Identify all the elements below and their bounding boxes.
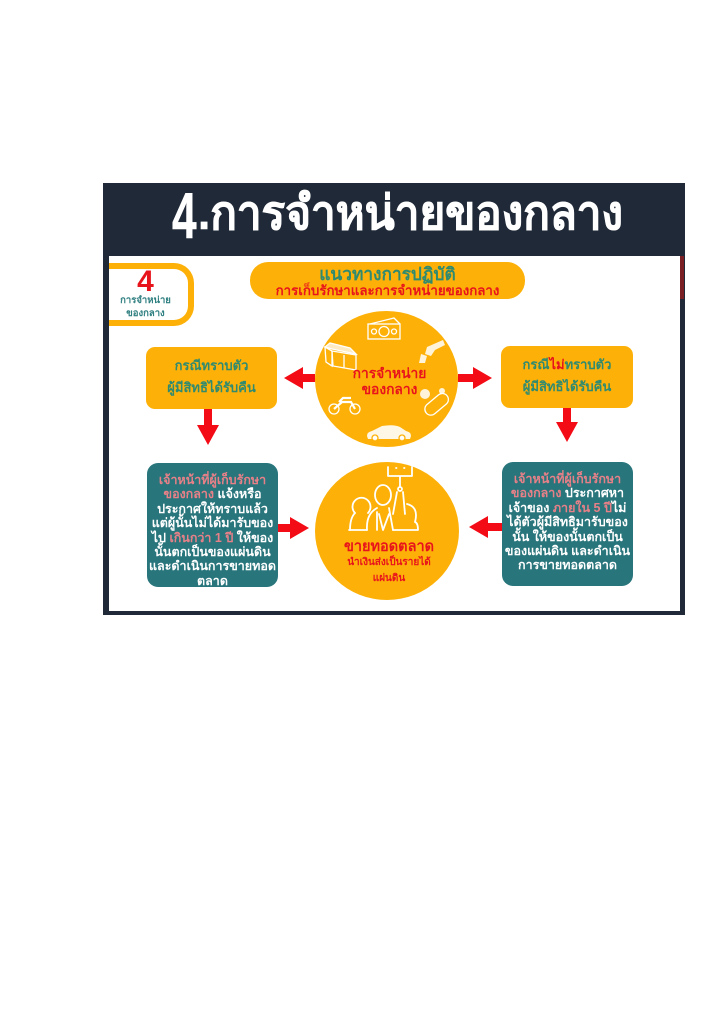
procedure text: เจ้าของ ภายใน 5 ปีไม่ [509, 501, 626, 515]
procedure text: ตลาด [197, 574, 228, 588]
procedure text: ไป เกินกว่า 1 ปี ให้ของ [152, 531, 273, 545]
title [172, 179, 623, 252]
heading text [276, 264, 499, 298]
procedure text [149, 471, 276, 588]
badge label: การจำหน่าย [120, 295, 171, 306]
circle text: นำเงินส่งเป็นรายได้ [347, 557, 431, 568]
icon: revolver [419, 340, 445, 363]
box text: กรณีทราบตัว [175, 358, 248, 373]
circle label: ของกลาง [362, 382, 417, 396]
icons: seized goods [324, 317, 449, 440]
panel: white content area [109, 256, 680, 611]
icon: auction crowd [348, 466, 419, 531]
circle label [353, 366, 426, 396]
procedure text: ของกลาง แจ้งหรือ [164, 487, 261, 501]
panel: unknown owner procedure [502, 462, 633, 586]
badge number: 4 [137, 265, 154, 298]
box text: ผู้มีสิทธิได้รับคืน [523, 379, 611, 394]
procedure text: การขายทอดตลาด [518, 558, 617, 572]
box text: ผู้มีสิทธิได้รับคืน [167, 380, 256, 395]
circle text: แผ่นดิน [373, 573, 405, 584]
procedure text [505, 470, 630, 572]
icon: cash [368, 318, 400, 339]
icon: motorcycle [329, 398, 360, 414]
arrow: circle to known box [284, 367, 315, 389]
icon: pills [420, 388, 451, 418]
badge label: ของกลาง [126, 308, 165, 318]
box text: กรณีไม่ทราบตัว [523, 357, 611, 372]
infographic frame [103, 183, 685, 615]
procedure text: แต่ผู้นั้นไม่ได้มารับของ [152, 516, 273, 530]
box text [167, 358, 256, 396]
procedure text: นั้น ให้ของนั้นตกเป็น [512, 530, 623, 544]
procedure text: และดำเนินการขายทอด [149, 559, 276, 573]
circle: public auction [315, 462, 459, 600]
heading text: แนวทางการปฏิบัติ [319, 264, 456, 284]
heading pill [250, 262, 525, 299]
procedure text: ของกลาง ประกาศหา [511, 486, 624, 500]
circle: disposal of seized goods [315, 311, 458, 447]
procedure text: เจ้าหน้าที่ผู้เก็บรักษา [159, 473, 266, 487]
box: owner unknown [501, 346, 633, 408]
circle text: ขายทอดตลาด [344, 539, 434, 555]
panel: known owner procedure [147, 463, 278, 587]
title: 4 [172, 179, 197, 252]
box text [522, 356, 612, 395]
panel: chapter badge [109, 263, 194, 326]
icon: car [367, 425, 411, 441]
arrows [197, 367, 578, 539]
procedure text: นั้นตกเป็นของแผ่นดิน [154, 545, 271, 559]
arrow: right procedure to auction [469, 516, 502, 538]
procedure text: ของแผ่นดิน และดำเนิน [505, 544, 630, 558]
circle label: การจำหน่าย [353, 366, 426, 381]
heading text: การเก็บรักษาและการจำหน่ายของกลาง [276, 283, 499, 298]
icon: treasure chest [325, 343, 356, 370]
arrow: circle to unknown box [458, 367, 492, 389]
arrow: known box down [197, 409, 219, 445]
box: owner known [146, 347, 277, 409]
badge label [120, 295, 171, 318]
procedure text: ได้ตัวผู้มีสิทธิมารับของ [507, 515, 628, 529]
circle text [344, 539, 434, 584]
procedure text: เจ้าหน้าที่ผู้เก็บรักษา [514, 472, 621, 486]
decorative right edge [680, 256, 684, 299]
title: .การจำหน่ายของกลาง [198, 186, 623, 239]
arrow: left procedure to auction [278, 517, 309, 539]
procedure text: ประกาศให้ทราบแล้ว [157, 502, 268, 516]
arrow: unknown box down [556, 408, 578, 442]
